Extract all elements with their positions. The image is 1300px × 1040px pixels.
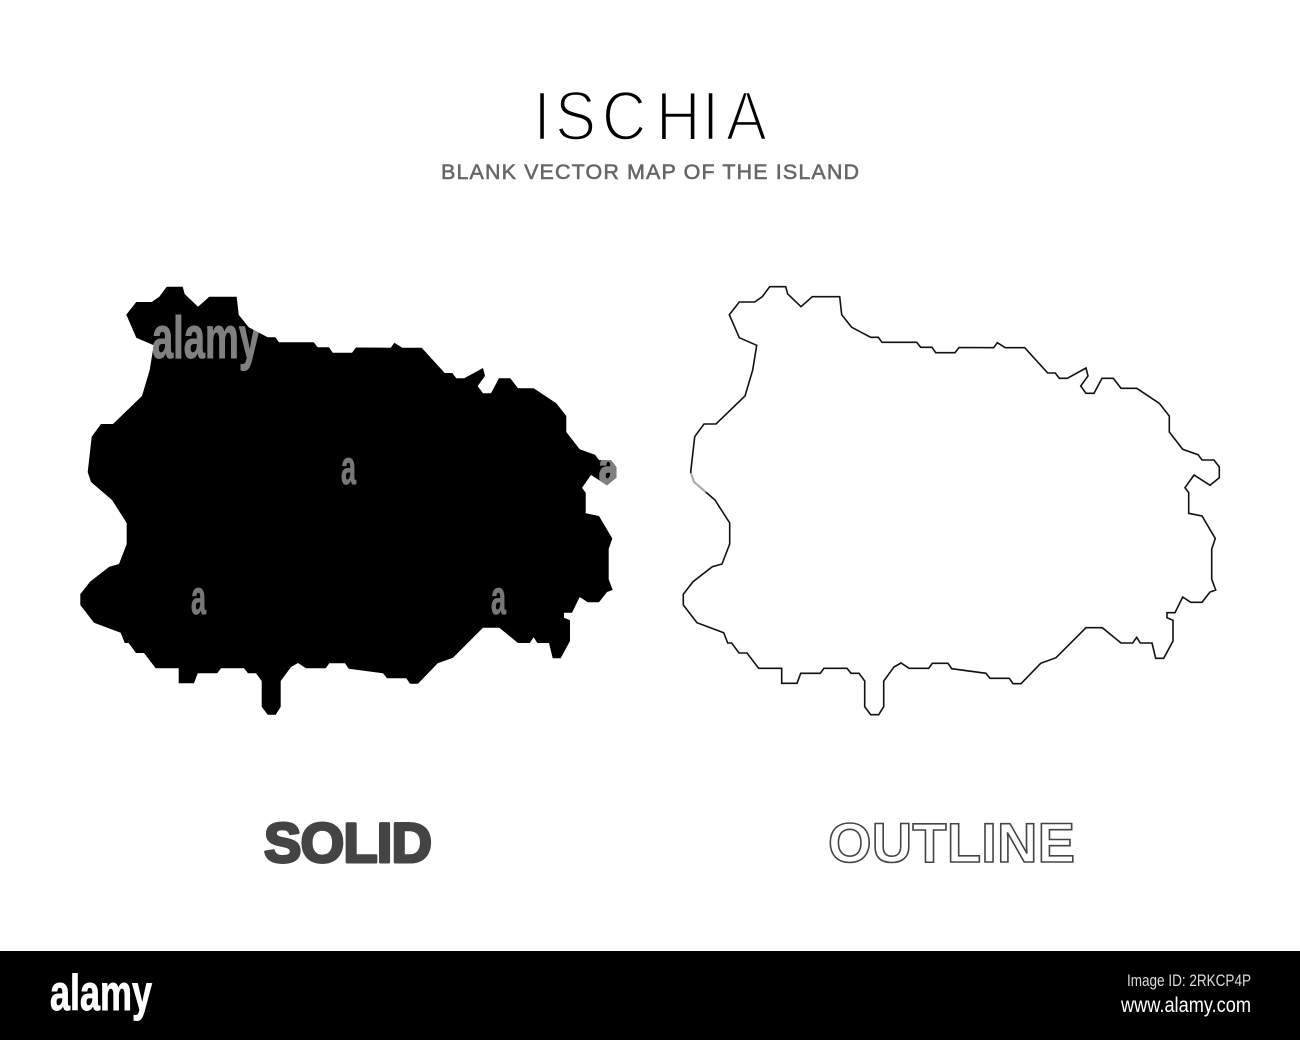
image id: Image ID: 2RKCP4P xyxy=(1127,971,1251,990)
watermark letter on eastern tip: a xyxy=(599,438,619,496)
watermark letter lower left: a xyxy=(191,572,206,625)
label: outline: OUTLINE xyxy=(828,811,1075,874)
watermarks on solid map xyxy=(152,305,619,625)
footer bar xyxy=(0,951,1300,1040)
watermark letter centre: a xyxy=(341,442,356,495)
footer logo: alamy xyxy=(50,965,152,1021)
title: ISCHIA xyxy=(533,76,767,155)
watermark wordmark: alamy xyxy=(152,305,260,371)
label: solid: SOLID xyxy=(264,811,432,874)
watermark letter lower right: a xyxy=(491,572,506,625)
subtitle: BLANK VECTOR MAP OF THE ISLAND xyxy=(441,160,859,184)
outline island map xyxy=(683,287,1219,715)
solid island map xyxy=(80,287,616,715)
website: www.alamy.com xyxy=(1120,994,1251,1017)
